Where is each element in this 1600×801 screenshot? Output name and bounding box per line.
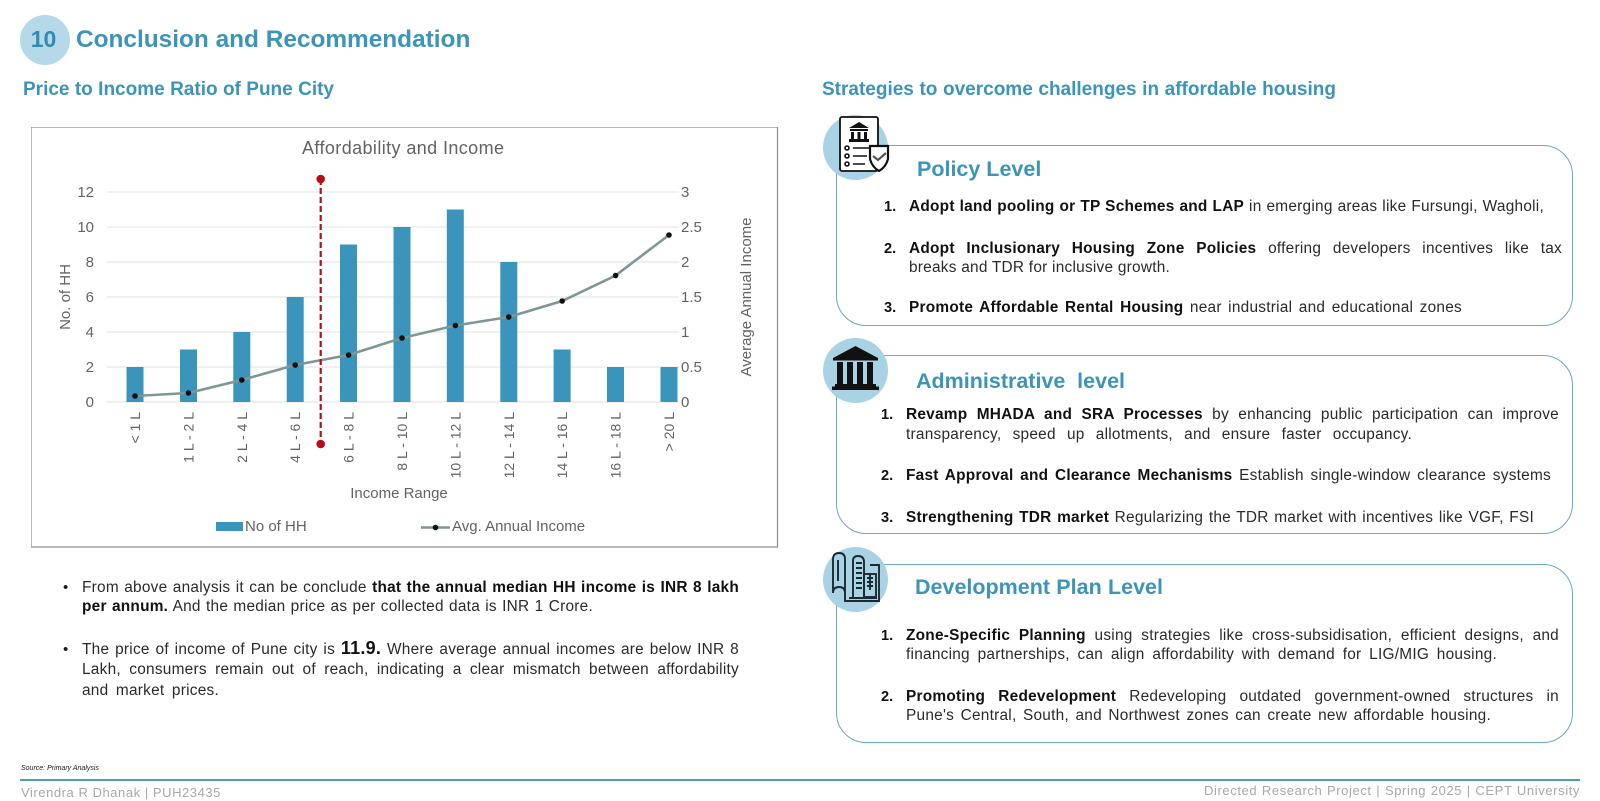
administrative list: Fast Approval and Clearance Mechanisms Establish single-window clearance systems	[906, 467, 1551, 484]
left axis ticks	[77, 184, 94, 411]
administrative list	[881, 406, 1559, 526]
category labels: 16 L - 18 L	[608, 412, 624, 478]
left heading: Price to Income Ratio of Pune City	[23, 79, 334, 100]
administrative list: Revamp MHADA and SRA Processes by enhancing public participation can improve	[906, 406, 1559, 423]
title: Conclusion and Recommendation	[76, 26, 470, 53]
item 1: 1.	[881, 407, 893, 423]
footer right: Directed Research Project | Spring 2025 | CEPT University	[1204, 783, 1580, 798]
item 1: 1.	[884, 199, 896, 215]
administrative list: Strengthening TDR market Regularizing the TDR market with incentives like VGF, FSI	[906, 509, 1534, 526]
category labels: 1 L - 2 L	[180, 412, 196, 463]
right axis ticks: 2	[681, 254, 689, 271]
development list: Zone-Specific Planning using strategies like cross-subsidisation, efficient designs, and	[906, 627, 1559, 644]
icon: policy document	[823, 115, 888, 180]
right axis ticks: 3	[681, 184, 689, 201]
policy list: Adopt Inclusionary Housing Zone Policies offering developers incentives like tax	[909, 240, 1562, 257]
axis titles	[57, 217, 755, 502]
axis titles: No. of HH	[57, 264, 74, 330]
policy list: Adopt land pooling or TP Schemes and LAP in emerging areas like Fursungi, Wagholi,	[909, 198, 1544, 215]
category labels: > 20 L	[661, 412, 677, 451]
development list: Pune's Central, South, and Northwest zones can create new affordable housing.	[906, 707, 1491, 724]
panel: policy level	[836, 145, 1573, 326]
bullet 2: •	[63, 641, 68, 658]
item 3: 3.	[881, 510, 893, 526]
panel: development plan level	[836, 564, 1573, 743]
conclusions text: The price of income of Pune city is 11.9. Where average annual incomes are below INR 8	[82, 638, 739, 658]
right axis ticks: 1	[681, 324, 689, 341]
bullet 1: •	[63, 579, 68, 596]
item 1: 1.	[881, 628, 893, 644]
administrative heading: Administrative level	[916, 369, 1125, 393]
chart: affordability and income: Affordability and Income	[302, 138, 504, 158]
conclusions text: Lakh, consumers remain out of reach, indicating a clear mismatch between affordability	[82, 661, 739, 678]
median income marker	[316, 175, 325, 448]
development list: Promoting Redevelopment Redeveloping outdated government-owned structures in	[906, 688, 1559, 705]
legend	[216, 518, 585, 535]
section number badge: 10	[31, 26, 56, 52]
item 2: 2.	[881, 468, 893, 484]
left axis ticks: 2	[86, 359, 94, 376]
right axis ticks: 0.5	[681, 359, 702, 376]
policy list	[884, 198, 1562, 316]
panel: administrative level	[836, 355, 1573, 534]
policy heading: Policy Level	[917, 157, 1041, 181]
footer left: Virendra R Dhanak | PUH23435	[21, 785, 221, 800]
category labels: 4 L - 6 L	[287, 412, 303, 463]
line: avg annual income	[132, 232, 672, 399]
bars: no of HH	[126, 210, 678, 402]
item 2: 2.	[884, 241, 896, 257]
axis titles: Average Annual Income	[738, 217, 755, 377]
policy list: breaks and TDR for inclusive growth.	[909, 259, 1170, 276]
right axis ticks: 2.5	[681, 219, 702, 236]
item 2: 2.	[881, 689, 893, 705]
left axis ticks: 0	[86, 394, 94, 411]
right axis ticks: 1.5	[681, 289, 702, 306]
conclusions text: and market prices.	[82, 682, 219, 699]
category labels: 6 L - 8 L	[341, 412, 357, 463]
source note: Source: Primary Analysis	[21, 765, 99, 772]
administrative list: transparency, speed up allotments, and ensure faster occupancy.	[906, 426, 1412, 443]
left axis ticks: 4	[86, 324, 94, 341]
category labels	[127, 412, 677, 478]
right heading: Strategies to overcome challenges in affordable housing	[822, 79, 1336, 100]
legend: Avg. Annual Income	[452, 518, 585, 535]
development list: financing partnerships, can align affordability with demand for LIG/MIG housing.	[906, 646, 1497, 663]
category labels: 14 L - 16 L	[554, 412, 570, 478]
development list	[881, 627, 1559, 724]
right axis ticks: 0	[681, 394, 689, 411]
left axis ticks: 12	[77, 184, 94, 201]
left axis ticks: 8	[86, 254, 94, 271]
left axis ticks: 6	[86, 289, 94, 306]
policy list: Promote Affordable Rental Housing near industrial and educational zones	[909, 299, 1462, 316]
legend: No of HH	[245, 518, 307, 535]
category labels: 10 L - 12 L	[447, 412, 463, 478]
category labels: < 1 L	[127, 412, 143, 444]
chart: affordability and income	[31, 127, 778, 548]
conclusions text: per annum. And the median price as per collected data is INR 1 Crore.	[82, 598, 593, 615]
axis titles: Income Range	[350, 485, 448, 502]
category labels: 2 L - 4 L	[234, 412, 250, 463]
right axis ticks	[681, 184, 702, 411]
left axis ticks: 10	[77, 219, 94, 236]
category labels: 8 L - 10 L	[394, 412, 410, 471]
development heading: Development Plan Level	[915, 575, 1163, 599]
item 3: 3.	[884, 300, 896, 316]
section number badge	[20, 15, 70, 65]
conclusions text: From above analysis it can be conclude that the annual median HH income is INR 8 lakh	[82, 579, 739, 596]
icon: city plan	[823, 547, 888, 612]
icon: government building	[823, 338, 888, 403]
conclusions text	[63, 579, 739, 699]
category labels: 12 L - 14 L	[501, 412, 517, 478]
